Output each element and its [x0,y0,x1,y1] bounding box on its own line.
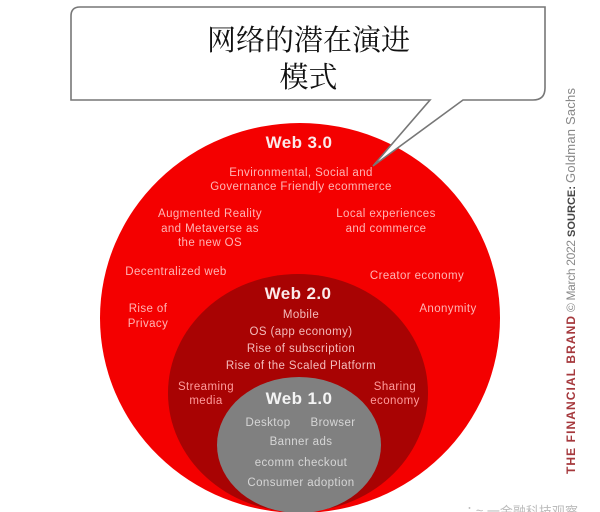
callout: speech bubble with pointer [71,7,545,166]
text: mobile: Mobile [283,309,319,321]
text: browser: Browser [311,417,355,429]
Web 2.0 labels: economy [370,395,420,407]
text: rise of privacy: Rise of [129,303,168,315]
Web 1.0 labels [246,389,355,489]
text: streaming media: Streaming [178,381,234,393]
heading: Web 2.0: Web 2.0 [265,284,331,303]
Web 3.0 labels: Privacy [128,318,168,330]
Web 3.0 labels [125,133,477,330]
source credit (vertical) [563,88,578,474]
concentric circle diagram [100,123,500,512]
text: anonymity: Anonymity [419,303,477,315]
source credit (vertical): © March 2022 [564,240,578,312]
Web 3.0 labels: Governance Friendly ecommerce [210,181,392,193]
text: rise of subscription: Rise of subscription [247,343,355,355]
text: local experiences: Local experiences [336,208,436,220]
Web 3.0 labels: and commerce [346,223,426,235]
text: OS app economy: OS (app economy) [250,326,352,338]
text: desktop: Desktop [246,417,290,429]
source credit (vertical): SOURCE: [566,186,578,237]
text: consumer adoption: Consumer adoption [247,477,355,489]
circle: Web 2.0 [168,274,428,512]
circle: Web 1.0 [217,377,381,512]
source credit (vertical): Goldman Sachs [563,88,578,183]
text: AR and metaverse: Augmented Reality [158,208,262,220]
Web 2.0 labels: media [189,395,223,407]
Web 2.0 labels [178,284,420,407]
Web 3.0 labels: the new OS [178,237,242,249]
text: decentralized web: Decentralized web [125,266,227,278]
title: callout text: 网络的潜在演进 [207,24,410,57]
circle: Web 3.0 [100,123,500,512]
text: creator economy: Creator economy [370,270,464,282]
heading: Web 1.0: Web 1.0 [266,389,332,408]
title: callout text line 2: 模式 [279,61,338,94]
Web 3.0 labels: and Metaverse as [161,223,259,235]
source credit (vertical): THE FINANCIAL BRAND [564,316,578,474]
text: ecomm checkout: ecomm checkout [255,457,348,469]
heading: Web 3.0: Web 3.0 [266,133,332,152]
text: ESG ecommerce: Environmental, Social and [229,167,373,179]
text: sharing economy: Sharing [374,381,416,393]
text: scaled platform: Rise of the Scaled Platform [226,360,376,372]
text: banner ads: Banner ads [270,436,332,448]
